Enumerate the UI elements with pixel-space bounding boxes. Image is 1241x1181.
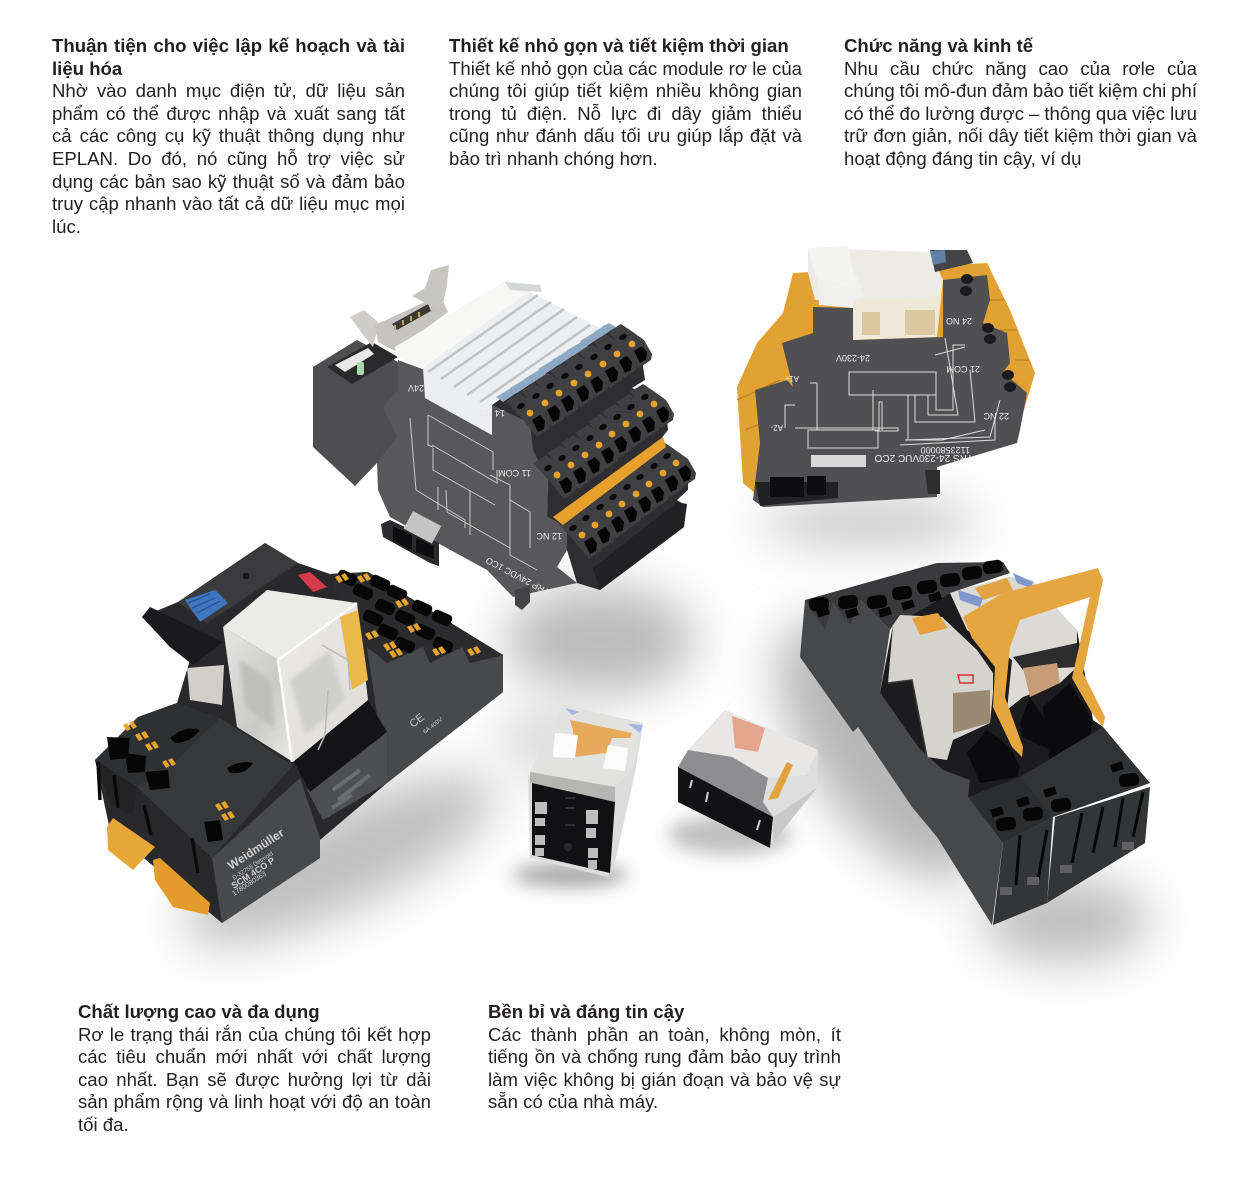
heading: Thuận tiện cho việc lập kế hoạch và tài xyxy=(52,35,405,56)
terminal labels xyxy=(408,383,562,597)
perforated terminal top xyxy=(335,568,481,658)
front faces xyxy=(993,787,1150,925)
barcode xyxy=(811,455,866,467)
heading: Thiết kế nhỏ gọn và tiết kiệm thời gian xyxy=(449,35,789,56)
black DIN foot xyxy=(755,470,940,506)
body text: Thiết kế nhỏ gọn của các module rơ le của xyxy=(449,58,802,79)
body text: chúng tôi mô-đun đảm bảo tiết kiệm chi phí xyxy=(844,80,1197,101)
device labels: 24 NO xyxy=(946,316,972,326)
body text: lúc. xyxy=(52,216,81,237)
grey side housing xyxy=(377,360,577,597)
black socket under relay xyxy=(293,700,387,792)
terminal row 3 xyxy=(558,443,696,559)
text block: planning and documentation xyxy=(52,35,405,237)
CE marking: CE xyxy=(407,711,427,730)
floor shadows xyxy=(165,500,1150,977)
dark module with blue knob xyxy=(178,543,298,623)
clear relay one xyxy=(888,613,993,760)
terminal labels: TRP 24VDC 1CO xyxy=(484,555,551,597)
side face xyxy=(800,600,1003,925)
terminal underlay xyxy=(492,325,688,590)
brand text: Weidmüller xyxy=(225,825,287,873)
terminal labels: 24V xyxy=(408,383,424,393)
device labels: TRS 24-230VUC 2CO xyxy=(874,452,973,463)
orange jumper bar xyxy=(553,437,666,525)
gateway top with green LED xyxy=(327,342,398,384)
body text: cả các công cụ kỹ thuật thông dụng như xyxy=(52,125,405,146)
interior underlay xyxy=(880,577,1103,843)
body text xyxy=(78,1024,431,1135)
body text: tối đa. xyxy=(78,1114,129,1135)
body text: phẩm có thể được nhập và xuất sang tất xyxy=(52,103,405,124)
text block: compact design xyxy=(449,35,802,169)
body text: trong tủ điện. Nỗ lực đi dây giảm thiểu xyxy=(449,103,802,124)
blue marker tags xyxy=(496,323,616,402)
heading: Chất lượng cao và đa dụng xyxy=(78,1001,320,1022)
body text: sản phẩm rộng và linh hoạt với độ an toàn xyxy=(78,1091,431,1112)
body text xyxy=(449,58,802,169)
top comb xyxy=(805,559,1010,630)
body text: làm việc không bị gián đoạn và bảo vệ sự xyxy=(488,1069,841,1090)
grey housing xyxy=(753,275,1027,507)
heading: liệu hóa xyxy=(52,58,122,79)
product: TRS relay module with orange backing xyxy=(737,246,1035,507)
product: relay base with orange handle xyxy=(800,559,1150,925)
body text: Nhờ vào danh mục điện tử, dữ liệu sản xyxy=(52,80,405,101)
top surfaces xyxy=(968,727,1150,843)
black comb rail xyxy=(593,502,687,590)
right base block xyxy=(330,572,503,783)
front module xyxy=(95,703,320,923)
clear relay xyxy=(223,590,368,762)
product: clear relay, pins side xyxy=(678,710,818,848)
heading: Bền bỉ và đáng tin cậy xyxy=(488,1001,684,1022)
terminal labels: 14 NO xyxy=(479,408,505,418)
terminal row 1 xyxy=(506,324,652,437)
circuit diagram xyxy=(785,338,1000,445)
body text: EPLAN. Do đó, nó cũng hỗ trợ việc sử xyxy=(52,148,405,169)
product: clear relay, pins up xyxy=(528,705,643,877)
heading xyxy=(52,35,405,79)
back relay xyxy=(808,248,943,300)
orange handle xyxy=(963,568,1105,757)
text block: high quality and versatile xyxy=(78,1001,431,1135)
front terminal holes xyxy=(960,274,1016,392)
text block: durable and reliable xyxy=(488,1001,841,1112)
device labels xyxy=(770,316,1009,463)
body text: chúng tôi giúp tiết kiệm nhiều không gian xyxy=(449,80,802,101)
device labels: A1+ xyxy=(784,374,799,383)
body text: cũng như đánh dấu tối ưu giúp lắp đặt và xyxy=(449,125,802,146)
terminal labels: 12 NC xyxy=(536,531,562,541)
brand text: 1780080363 xyxy=(231,871,268,898)
black retaining fins xyxy=(967,683,1093,783)
terminal labels: 11 COM xyxy=(498,468,531,478)
body text: hoạt động đáng tin cậy, ví dụ xyxy=(844,148,1081,169)
device labels: 21 COM xyxy=(946,364,980,374)
ribbon connector xyxy=(350,265,449,351)
body text xyxy=(52,80,405,237)
silhouette underlay xyxy=(95,543,503,923)
body text: Nhu cầu chức năng cao của rơle của xyxy=(844,58,1197,79)
body text xyxy=(488,1024,841,1112)
body text: tiếng ồn và chống rung đảm bảo quy trình xyxy=(488,1046,841,1067)
terminal row 2 xyxy=(533,384,674,499)
relay pin face xyxy=(532,783,615,873)
CE marking: 6A 400V xyxy=(423,717,444,736)
CE marking xyxy=(407,711,444,736)
brand text: D-32758 Detmold xyxy=(232,851,275,882)
clear relay two xyxy=(950,573,1077,710)
device labels: 1123580000 xyxy=(921,445,970,455)
rear clear relay xyxy=(187,665,224,705)
body text: bảo trì nhanh chóng hơn. xyxy=(449,148,658,169)
DIN rail foot xyxy=(381,520,530,610)
circuit diagram lines xyxy=(410,415,537,570)
body text: các tiêu chuẩn mới nhất với chất lượng xyxy=(78,1046,431,1067)
heading: Chức năng và kinh tế xyxy=(844,35,1033,56)
body text: truy cập nhanh vào tất cả dữ liệu mục mọi xyxy=(52,193,405,214)
black clip xyxy=(142,607,223,665)
brand text xyxy=(225,825,287,898)
middle section with logo xyxy=(307,733,387,820)
text block: function and economy xyxy=(844,35,1197,169)
device labels: 22 NC xyxy=(983,411,1009,421)
body text: Rơ le trạng thái rắn của chúng tôi kết hợp xyxy=(78,1024,431,1045)
body text xyxy=(844,58,1197,169)
device labels: 24-230V xyxy=(836,353,870,363)
white relay tops xyxy=(395,280,600,435)
red tab xyxy=(298,572,327,592)
clear relay cover xyxy=(808,246,943,340)
body text: dụng các bản sao kỹ thuật số và đảm bảo xyxy=(52,171,405,192)
body text: cao nhất. Bạn sẽ được hưởng lợi từ dải xyxy=(78,1069,431,1090)
body text: Các thành phần an toàn, không mòn, ít xyxy=(488,1024,841,1045)
orange plates xyxy=(737,263,1035,495)
body text: trữ đơn giản, nối dây tiết kiệm thời gian và xyxy=(844,125,1197,146)
device labels: A2- xyxy=(770,423,783,432)
back terminal with blue tag xyxy=(930,250,973,272)
orange release levers xyxy=(107,818,210,915)
body text: có thể đo lường được – thông qua việc lưu xyxy=(844,103,1197,124)
product: TRP relay module block xyxy=(313,265,696,610)
relay black base xyxy=(678,767,817,848)
body text: sẵn có của nhà máy. xyxy=(488,1091,658,1112)
barcode xyxy=(404,511,441,544)
product: relay base with clear relay xyxy=(95,543,503,923)
gateway module xyxy=(313,340,400,486)
brand text: SCM 4CO P xyxy=(230,855,277,891)
